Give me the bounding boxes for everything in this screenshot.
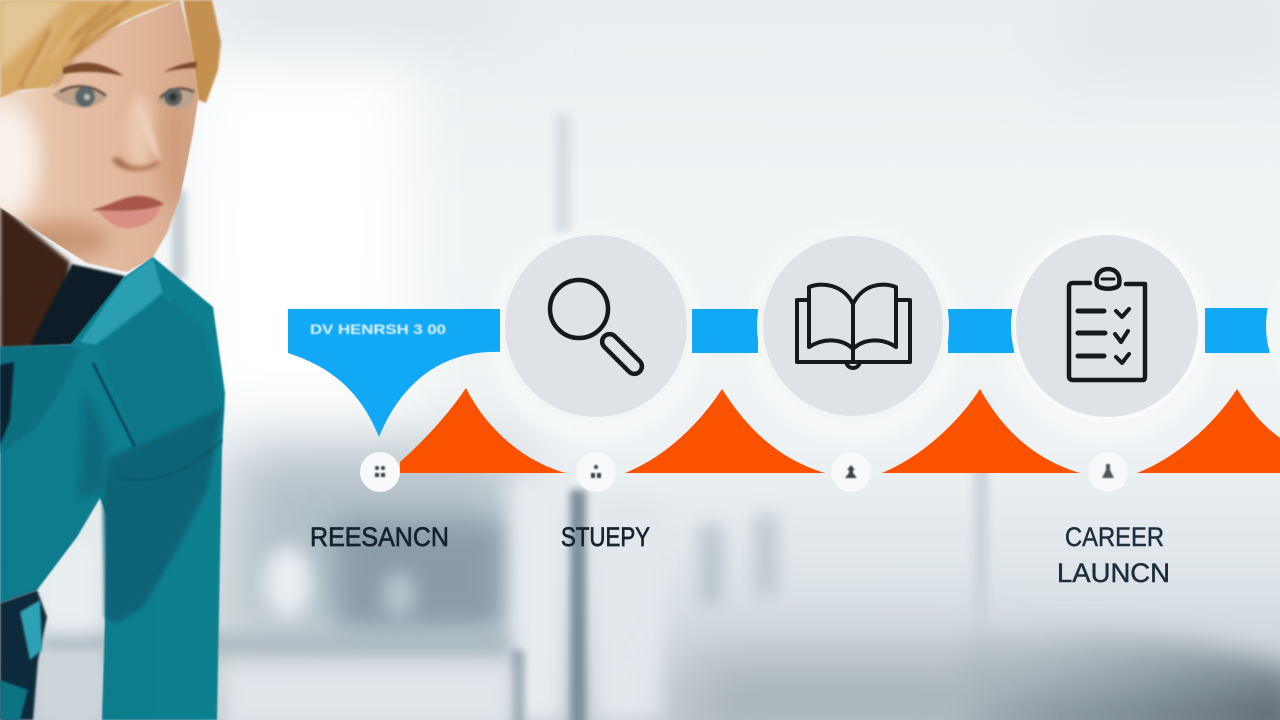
icon: node 4 person [1102,464,1114,478]
label: career launch [1057,522,1170,588]
label: career launch: CAREER [1065,522,1164,552]
label: study: STUEPY [561,522,650,552]
orange peak 3 [882,389,1080,473]
blue connector bars [692,308,1271,353]
step circle: research [500,230,692,422]
icon: node 1 people [375,466,385,477]
person: sleeve shading [103,407,223,623]
icon: open book [797,285,910,368]
person: face [0,0,198,272]
person: light collar [80,258,163,345]
person: lips [91,196,164,228]
label: research: REESANCN [310,522,449,552]
person in teal jacket [0,0,225,720]
person: dark collar [30,264,125,345]
soft glow behind step circles [488,227,1215,443]
person: upper sleeve [97,293,223,447]
orange peak 4 [1137,389,1280,473]
small node 1 [360,452,400,492]
timeline [288,230,1280,492]
person: eyebrows [63,62,197,76]
step circle: next, cropped at the edge [1266,230,1280,422]
icon: node 2 people [591,465,601,478]
label: career launch: LAUNCN [1057,558,1170,588]
person: eyes [52,86,196,109]
person: waist detail [0,590,47,720]
blue banner with pointer [288,309,500,437]
orange peak 1 [400,388,566,473]
icon: node 3 person [845,465,857,478]
step circle: career launch [1011,230,1203,422]
step circle: study [757,230,949,422]
person: nose [112,105,160,171]
person: jacket body [0,257,225,720]
person: inner scarf [0,345,80,453]
banner text: DV HENRSH 3 00 [310,321,446,337]
small node 4 [1088,452,1128,492]
person: hair [0,0,221,103]
small node 3 [831,452,871,492]
orange peak 2 [625,389,825,473]
small node 2 [576,452,616,492]
icon: magnifying glass [550,280,645,377]
person: hair behind neck [0,205,70,350]
icon: clipboard checklist [1069,269,1145,380]
